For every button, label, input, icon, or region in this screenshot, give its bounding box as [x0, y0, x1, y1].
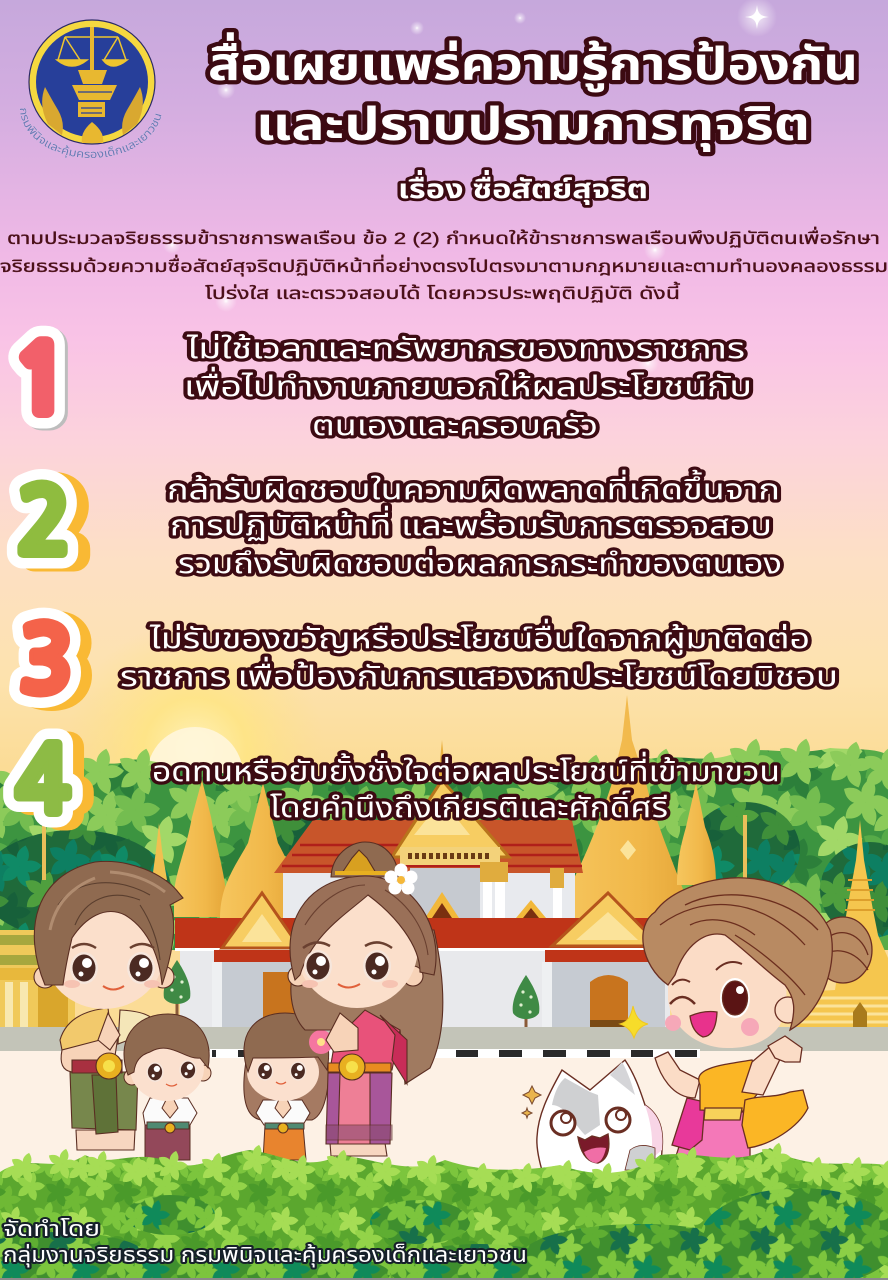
- logo arc text: [20, 108, 162, 158]
- subtitle: เรื่อง ซื่อสัตย์สุจริต: [398, 170, 648, 205]
- character: man: [34, 861, 183, 1150]
- character: winking girl: [643, 878, 872, 1175]
- curb stripe: [210, 1049, 700, 1058]
- scale: [57, 37, 127, 66]
- ground: [0, 1051, 888, 1190]
- right gold stupa and stairs: [790, 820, 888, 1035]
- stupa 1: [174, 780, 226, 917]
- title: และปราบปรามการทุจริต: [256, 98, 810, 152]
- number 2: 2: [17, 478, 71, 567]
- title: [208, 32, 858, 152]
- bun: [814, 917, 872, 983]
- character: little girl: [244, 1013, 333, 1160]
- central hall roof: [274, 820, 583, 873]
- right gate: [542, 893, 665, 1027]
- number 2: 2: [29, 481, 83, 570]
- item 2 text: รวมถึงรับผิดชอบต่อผลการกระทำของตนเอง: [178, 548, 782, 580]
- gable band: [400, 847, 500, 865]
- tree band background: [0, 737, 888, 950]
- character: woman: [288, 842, 443, 1156]
- temple complex: [0, 695, 888, 1035]
- number 3: 3: [30, 620, 84, 709]
- hair: [643, 878, 832, 1030]
- naga right: [122, 87, 143, 135]
- front bushes: [0, 1142, 888, 1280]
- intro paragraph: [0, 226, 888, 303]
- left gate: [212, 893, 306, 1027]
- naga left: [42, 87, 63, 135]
- small left stupa: [152, 823, 167, 880]
- intro paragraph: โปร่งใส และตรวจสอบได้ โดยควรประพฤติปฏิบัติ ดังนี้: [205, 281, 680, 303]
- footer credit: กลุ่มงานจริยธรรม กรมพินิจและคุ้มครองเด็กและเยาวชน: [3, 1242, 527, 1268]
- face: [668, 923, 786, 1048]
- left gold building: [0, 930, 75, 1027]
- open eye: [720, 978, 750, 1018]
- footer credit: [3, 1218, 527, 1268]
- intro paragraph: จริยธรรมด้วยความซื่อสัตย์สุจริตปฏิบัติหน้าที่อย่างตรงไปตรงมาตามกฎหมายและตามทำนองคลองธรรม: [0, 254, 888, 277]
- logo seal: [29, 20, 155, 144]
- raised arm: [742, 1045, 782, 1095]
- item 4 text: โดยคำนึงถึงเกียรติและศักดิ์ศรี: [270, 791, 668, 824]
- top bun: [331, 842, 398, 877]
- small diamond on big stupa: [620, 840, 636, 860]
- intro paragraph: ตามประมวลจริยธรรมข้าราชการพลเรือน ข้อ 2 (2) กำหนดให้ข้าราชการพลเรือนพึงปฏิบัติตนเพื่อรักษา: [7, 226, 880, 248]
- item 3 text: ราชการ เพื่อป้องกันการแสวงหาประโยชน์โดยมิชอบ: [120, 656, 838, 693]
- number 1: 1: [14, 336, 68, 425]
- hall windows and columns: [483, 865, 492, 918]
- yellow sleeve: [742, 1090, 808, 1148]
- bottom edge: [0, 1278, 888, 1280]
- stupa 4: [677, 783, 716, 885]
- back hair: [291, 930, 443, 1084]
- pavement: [0, 1027, 888, 1051]
- character: boy: [124, 1014, 211, 1160]
- number 1: 1: [17, 338, 71, 427]
- wink: [670, 997, 695, 1004]
- brows: [672, 962, 742, 985]
- item 4 text: [152, 751, 780, 824]
- footer credit: จัดทำโดย: [3, 1218, 100, 1241]
- sparkles in sky: [163, 0, 777, 374]
- left arm: [655, 1052, 700, 1098]
- central hall wall: [283, 865, 575, 920]
- long red band: [175, 918, 665, 948]
- item 1 text: เพื่อไปทำงานภายนอกให้ผลประโยชน์กับ: [184, 366, 752, 403]
- central gable: [392, 780, 509, 857]
- item 1 text: ไม่ใช้เวลาและทรัพยากรของทางราชการ: [186, 333, 745, 365]
- cypress trees: [164, 960, 190, 1020]
- title: สื่อเผยแพร่ความรู้การป้องกัน: [208, 32, 858, 92]
- yellow top: [699, 1060, 765, 1112]
- yellow star sparkle: [620, 1006, 648, 1038]
- long wall: [180, 951, 670, 1027]
- item 3 text: [120, 618, 838, 693]
- blush: [665, 1015, 681, 1031]
- sun: [65, 620, 325, 880]
- item 1 text: ตนเองและครอบครัว: [312, 410, 598, 442]
- number 2: 2: [17, 478, 71, 567]
- thin spires: [42, 815, 747, 880]
- lotus bud: [82, 122, 103, 143]
- stupa 2: [220, 783, 298, 918]
- waistband: [704, 1108, 742, 1120]
- logo: [20, 20, 162, 158]
- item 2 text: กล้ารับผิดชอบในความผิดพลาดที่เกิดขึ้นจาก: [167, 469, 780, 506]
- pedestal: [72, 70, 117, 117]
- character: cat: [537, 1060, 662, 1180]
- number 4: 4: [16, 737, 70, 826]
- front hair: [290, 876, 436, 980]
- number 4: 4: [16, 737, 70, 826]
- small gold sparkles by cat: [522, 1086, 541, 1118]
- item 3 text: ไม่รับของขวัญหรือประโยชน์อื่นใดจากผู้มาติดต่อ: [149, 618, 810, 656]
- big stupa right: [555, 695, 694, 918]
- skirt: [670, 1112, 750, 1175]
- item 4 text: อดทนหรือยับยั้งชั่งใจต่อผลประโยชน์ที่เข้ามาขวน: [152, 751, 780, 788]
- number 3: 3: [19, 617, 73, 706]
- logo organisation name on arc: กรมพินิจและคุ้มครองเด็กและเยาวชน: [20, 108, 162, 158]
- item 1 text: [184, 333, 752, 442]
- number 1: 1: [14, 336, 68, 425]
- mouth: [690, 1012, 717, 1037]
- number 4: 4: [27, 740, 81, 829]
- item 2 text: การปฏิบัติหน้าที่ และพร้อมรับการตรวจสอบ: [170, 505, 772, 542]
- number 3: 3: [19, 617, 73, 706]
- item 2 text: [167, 469, 782, 580]
- center spire: [437, 740, 447, 790]
